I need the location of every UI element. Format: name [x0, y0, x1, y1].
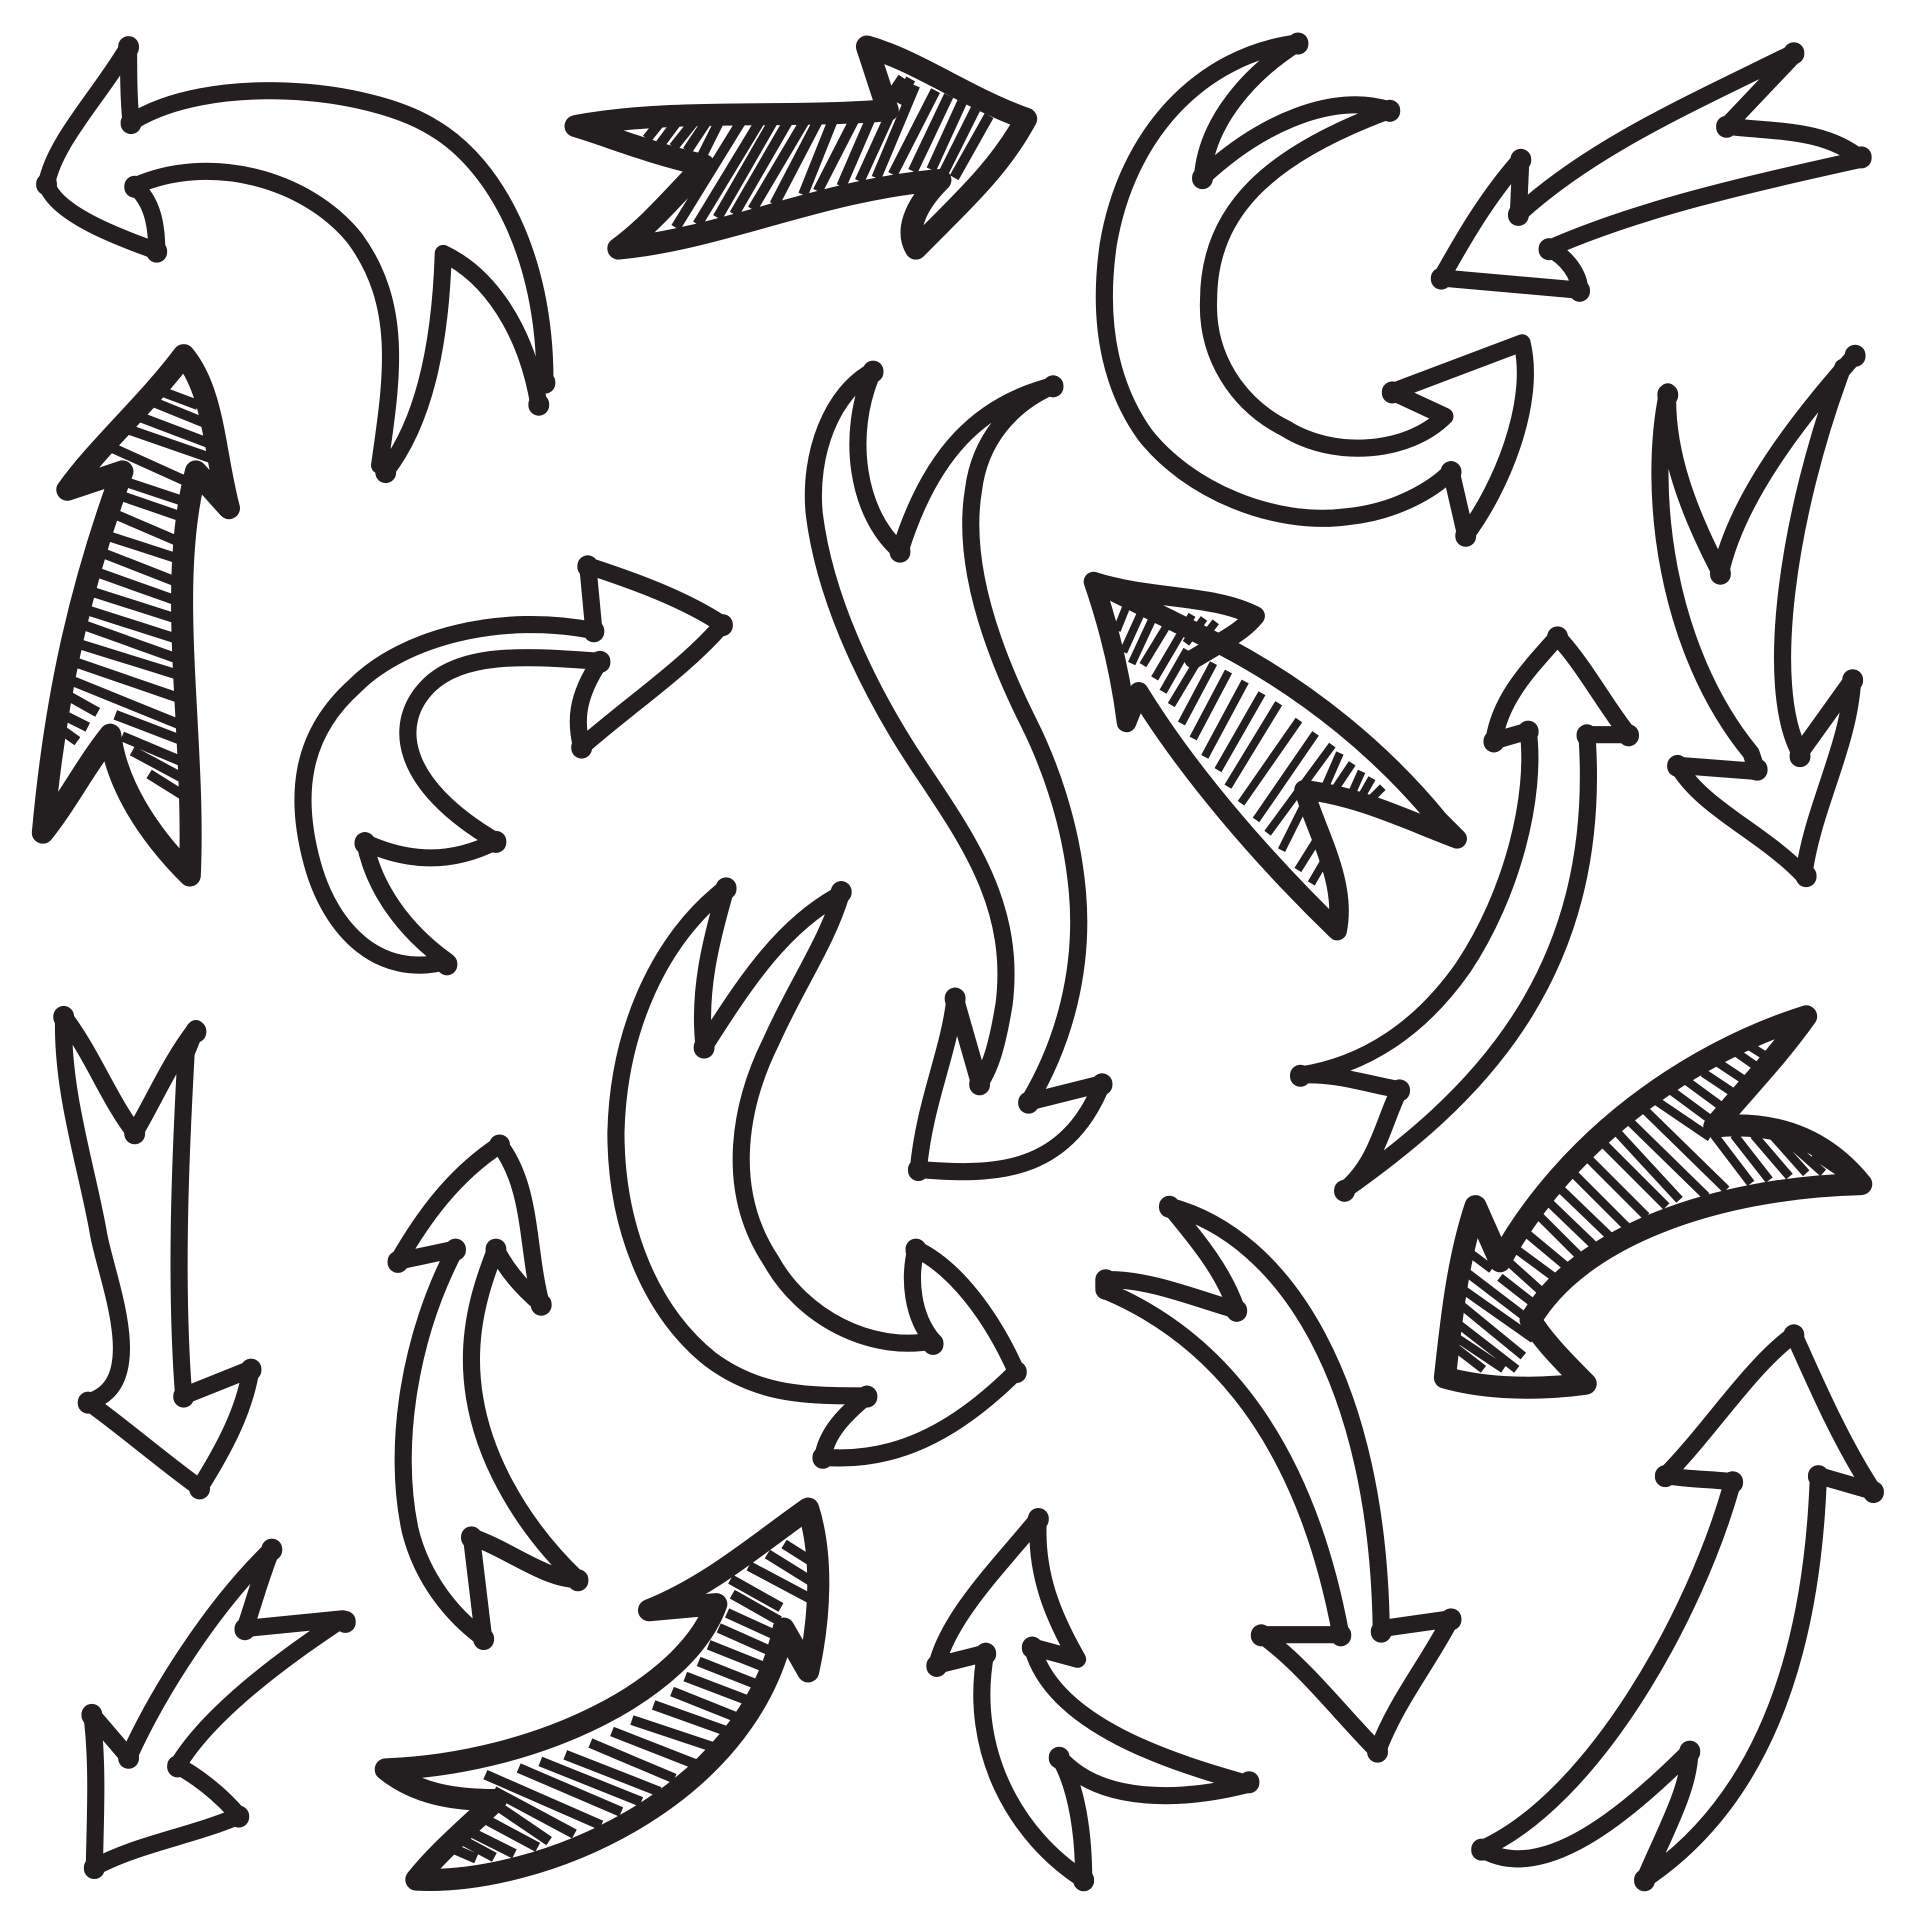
arrow: bottom right large pointing up	[1482, 1335, 1873, 1881]
arrow: bottom centre pointing up	[937, 1518, 1249, 1881]
arrow: lower left curved pointing up	[398, 1145, 578, 1640]
arrow: top centre hatched pointing right	[576, 47, 1026, 249]
arrow: large C-curve top centre	[1104, 43, 1525, 536]
arrow: left hatched pointing up	[43, 355, 229, 876]
arrow: left lower pointing down	[64, 1016, 251, 1489]
arrow: centre left curled pointing right	[303, 566, 722, 965]
arrow: right edge pointing down	[1660, 355, 1855, 877]
arrow: bottom left pointing lower-left	[92, 1549, 345, 1869]
arrow: top right pointing lower-left	[1441, 53, 1861, 291]
arrow: large centre curved pointing right	[616, 888, 1016, 1458]
arrow: bottom hatched pointing upper-right	[386, 1509, 818, 1880]
arrow: top left curved	[47, 47, 545, 473]
arrow: right hatched curved pointing lower-left	[1445, 1016, 1861, 1388]
arrow: right curved pointing up	[1300, 637, 1629, 1191]
arrow: tall wavy centre pointing down	[813, 371, 1102, 1172]
arrow: centre right hatched pointing upper-left	[1093, 582, 1457, 931]
arrow: lower right curved pointing down	[1106, 1206, 1451, 1752]
